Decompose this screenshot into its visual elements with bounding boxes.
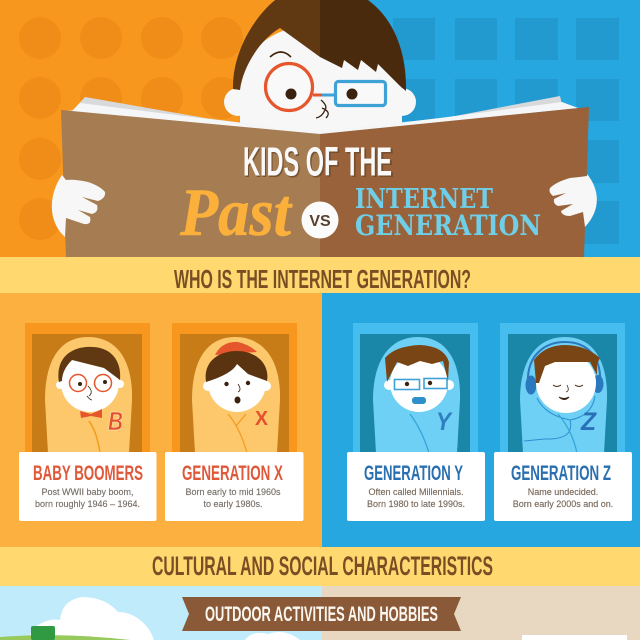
card: baby boomers: Post WWII baby boom, bbox=[41, 487, 134, 497]
icon: open book bbox=[60, 96, 589, 258]
panel: older generations background bbox=[0, 293, 322, 547]
panel: generation z bbox=[500, 323, 625, 453]
icon: reading child head bbox=[224, 0, 416, 140]
card: generation z bbox=[494, 452, 632, 521]
title: VS bbox=[309, 213, 331, 230]
panel: generation z: Z bbox=[580, 408, 598, 436]
panel: generation x bbox=[172, 323, 297, 453]
title: KIDS OF THE bbox=[244, 140, 394, 186]
card: generation y: Born 1980 to late 1990s. bbox=[367, 499, 465, 509]
icon: right hand bbox=[549, 174, 597, 227]
card: baby boomers: born roughly 1946 – 1964. bbox=[35, 499, 140, 509]
title: GENERATION bbox=[355, 209, 541, 242]
title bbox=[179, 138, 541, 250]
panel: generation y: Y bbox=[436, 408, 453, 436]
card: generation y: GENERATION Y bbox=[364, 462, 463, 485]
card: generation x: to early 1980s. bbox=[203, 499, 263, 509]
panel: baby boomers: B bbox=[108, 406, 123, 436]
panel: generation x: X bbox=[255, 408, 269, 430]
banner: outdoor activities and hobbies: OUTDOOR ACTIVITIES AND HOBBIES bbox=[205, 603, 438, 626]
title: KIDS OF THE bbox=[243, 138, 392, 184]
icon: round orange glasses bbox=[266, 64, 312, 110]
icon: blue rectangular glasses bbox=[336, 82, 386, 106]
panel: baby boomers bbox=[25, 323, 150, 453]
panel: header background bbox=[0, 0, 640, 258]
heading band: who is the internet generation bbox=[0, 257, 640, 294]
card: generation x bbox=[165, 452, 304, 521]
card: generation z: Born early 2000s and on. bbox=[513, 499, 613, 509]
banner: outdoor activities and hobbies bbox=[182, 597, 461, 631]
card: generation z: Name undecided. bbox=[528, 487, 598, 497]
heading band: cultural and social characteristics bbox=[0, 547, 640, 586]
panel: younger generations background bbox=[322, 293, 640, 547]
panel: outdoor past sky scene bbox=[0, 586, 322, 640]
card: generation x: GENERATION X bbox=[182, 462, 283, 485]
panel: outdoor present indoor scene bbox=[322, 586, 640, 640]
card: baby boomers: BABY BOOMERS bbox=[33, 462, 143, 485]
card: generation y: Often called Millennials. bbox=[368, 487, 464, 497]
icon: left hand bbox=[52, 175, 105, 237]
card: baby boomers bbox=[19, 452, 156, 521]
title: Past bbox=[179, 174, 293, 250]
card: generation y bbox=[347, 452, 485, 521]
panel: generation y bbox=[353, 323, 478, 453]
card: generation x: Born early to mid 1960s bbox=[185, 487, 281, 497]
title: INTERNET bbox=[355, 184, 493, 215]
